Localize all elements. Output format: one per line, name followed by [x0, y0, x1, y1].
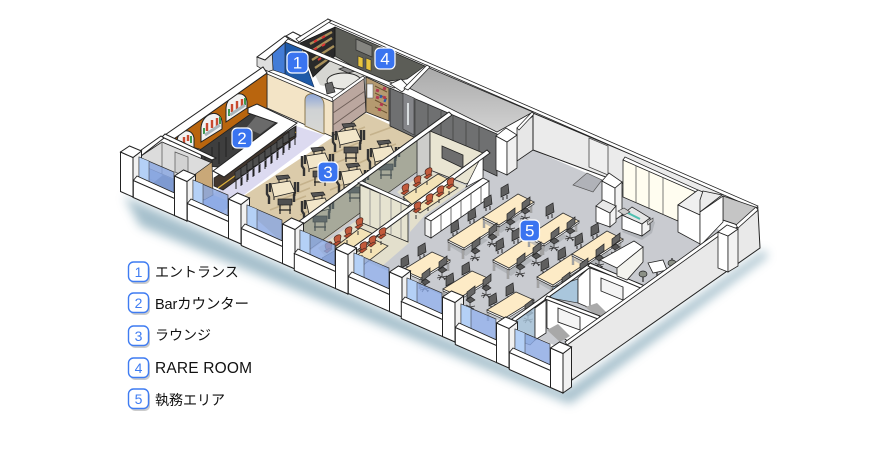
legend item 5: 執務エリア: [155, 392, 225, 408]
legend item 5: 5: [135, 391, 143, 407]
copier: [618, 207, 655, 240]
legend item 3: ラウンジ: [155, 327, 211, 343]
closets and recess: [678, 190, 758, 246]
legend item 5: [128, 389, 225, 411]
beige wall with arched door: [265, 70, 333, 137]
bookshelf wall: [366, 77, 389, 121]
meeting tables and orange chairs: [322, 150, 490, 272]
upper meeting room walls and floor: [397, 131, 483, 232]
desk D: [403, 252, 450, 289]
arch shelves: [177, 131, 194, 148]
glass partition: [287, 112, 452, 256]
front right rooms: [512, 263, 645, 345]
legend item 3: [128, 326, 211, 348]
marker 2: [232, 128, 252, 148]
marker 1: 1: [293, 54, 302, 72]
orange bar wall with arched shelves: [162, 67, 267, 150]
floor: office area: [285, 100, 724, 350]
desk row C: [537, 254, 588, 296]
back wall, door, mat: [328, 19, 758, 225]
front wall: windows, sills and pillars: [120, 146, 572, 393]
legend item 3: 3: [135, 328, 143, 344]
lounge tables: [267, 123, 399, 231]
tall cabinet and shredder: [596, 173, 622, 227]
artwork on rare room wall: [356, 39, 372, 57]
bar counter: [200, 104, 297, 190]
left glass room: [137, 134, 216, 205]
marker 1: [287, 52, 308, 73]
legend item 4: RARE ROOM: [155, 360, 252, 377]
rear wall and dark door wall: [390, 67, 533, 176]
marker 3: [318, 162, 338, 182]
legend item 4: [128, 358, 252, 380]
lounge and bar floors: [190, 113, 417, 258]
legend item 2: [128, 293, 249, 315]
entrance walls: [257, 32, 314, 87]
lower meeting room: [318, 181, 411, 268]
marker 5: [520, 220, 540, 241]
marker 2: 2: [237, 129, 247, 148]
legend: [128, 262, 252, 411]
desks and chairs: working area: [401, 184, 623, 329]
desk F: [487, 292, 534, 329]
mauve partition wall: [332, 76, 366, 136]
legend item 1: 1: [135, 264, 143, 280]
marker 4: [375, 48, 395, 69]
legend item 1: [128, 262, 239, 284]
building floor plan: [120, 19, 760, 393]
interior pillars and bands: [285, 19, 534, 175]
low white cabinets: [425, 178, 489, 238]
shelf items: [310, 32, 334, 68]
break corner: counters, table and stools: [600, 241, 676, 282]
marker 4: 4: [380, 50, 390, 68]
legend item 1: エントランス: [155, 264, 239, 280]
desk E: [443, 271, 490, 308]
right outer wall: [565, 207, 760, 380]
oval table: [327, 73, 361, 89]
rare room: back walls and floor: [300, 27, 425, 95]
bar stools: [235, 127, 295, 189]
legend item 2: Barカウンター: [155, 296, 249, 313]
white storage lockers: [623, 157, 698, 221]
desk row A: [448, 217, 499, 259]
back chairs: [451, 220, 459, 236]
legend item 4: 4: [135, 360, 143, 376]
marker 3: 3: [323, 163, 333, 182]
legend item 2: 2: [135, 295, 143, 311]
marker 5: 5: [525, 222, 534, 240]
desk row B: [493, 237, 544, 279]
drop shadow under building: [124, 196, 768, 404]
